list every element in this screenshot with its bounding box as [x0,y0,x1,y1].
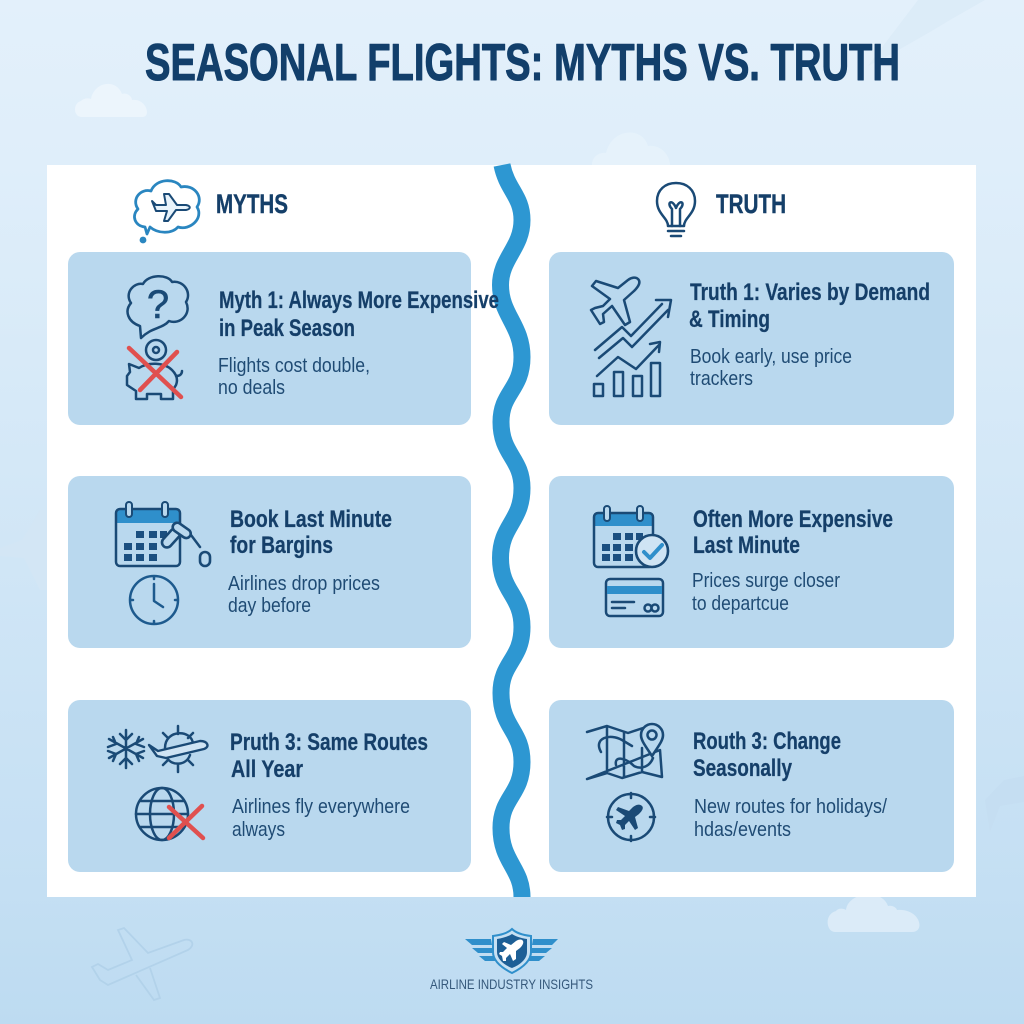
text: truth 2: Prices surge closer [692,569,840,592]
text: myth 3: Airlines fly everywhere [232,795,410,818]
text: truth 2: to departcue [692,592,789,615]
icon: map with pin and compass plane [587,724,663,841]
background plane right edge [985,776,1024,832]
text: myth 2: day before [228,594,311,617]
text: myth 3: All Year [231,756,303,783]
icon: question bubble and crossed piggy bank: ? [147,283,169,327]
text: myth 1: Myth 1: Always More Expensive [219,287,499,314]
column header: myths [134,181,288,243]
text: myth 2: Book Last Minute [230,506,392,533]
heading: truth: TRUTH [716,189,786,219]
text: myth 3 [230,729,428,841]
panel: truth 3 [549,700,954,872]
text: truth 1: Book early, use price [690,345,852,368]
icon: plane, rising arrow and bar chart [591,278,671,396]
background cloud behind panel [592,132,670,165]
text: truth 1: Truth 1: Varies by Demand [690,279,930,306]
text: truth 3: New routes for holidays/ [694,795,887,818]
white content panel [47,165,976,897]
background plane left edge [0,510,47,590]
icon: calendar with check and credit card [594,506,668,616]
background plane top right [868,0,985,66]
column header: truth [657,183,786,236]
text: truth 3 [693,728,887,841]
icon: calendar with chain and clock [116,502,210,624]
text: truth 1: trackers [690,367,753,390]
icon: light bulb [657,183,695,236]
panel: truth 1 [549,252,954,425]
text: myth 1: in Peak Season [219,315,355,342]
icon: snowflake, sun with plane, crossed globe [108,726,207,840]
text: myth 3: Pruth 3: Same Routes [230,729,428,756]
footer logo [430,929,593,992]
text: truth 3: Routh 3: Change [693,728,841,755]
winding ribbon divider [500,165,522,897]
text: truth 1: & Timing [689,306,770,333]
text: myth 2 [228,506,392,617]
heading: myths: MYTHS [216,189,288,219]
text: truth 2: Last Minute [693,532,800,559]
panel: myth 1 [68,252,499,425]
text: myth 2: for Bargins [230,532,333,559]
text: myth 1: Flights cost double, [218,354,370,377]
text: truth 1 [689,279,930,390]
background plane bottom left [92,928,192,1000]
text: truth 2: Often More Expensive [693,506,893,533]
brand name: AIRLINE INDUSTRY INSIGHTS [430,976,593,992]
text: myth 2: Airlines drop prices [228,572,380,595]
text: truth 3: Seasonally [693,755,793,782]
panel: myth 3 [68,700,471,872]
panel: truth 2 [549,476,954,648]
text: myth 3: always [232,818,285,841]
text: myth 1: no deals [218,376,285,399]
icon: thought bubble with plane [134,181,199,243]
text: myth 1 [218,287,499,399]
icon: winged shield with plane [465,929,558,973]
icon: question bubble and crossed piggy bank [127,276,188,399]
background cloud bottom right [828,894,919,932]
text: truth 3: hdas/events [694,818,791,841]
panel: myth 2 [68,476,471,648]
text: truth 2 [692,506,893,615]
background cloud left [75,84,147,117]
